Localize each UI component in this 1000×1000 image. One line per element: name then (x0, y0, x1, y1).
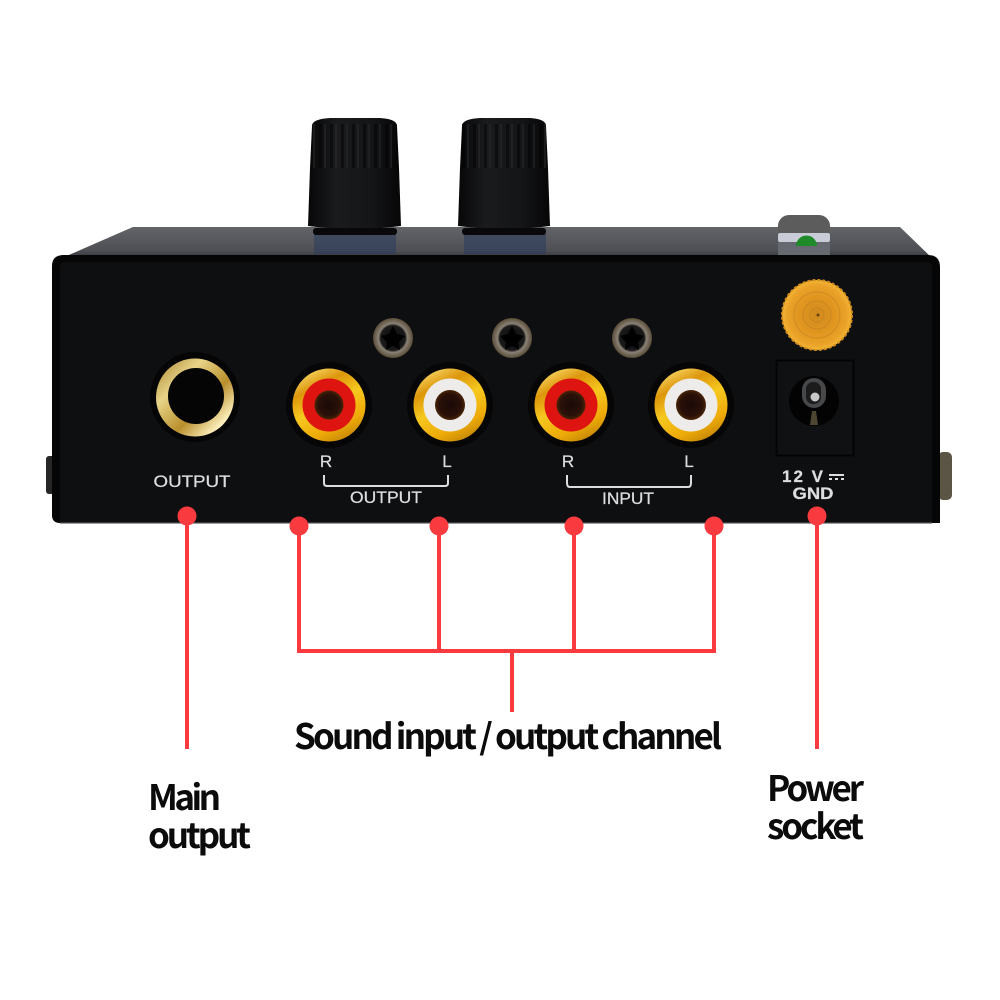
panel screws (373, 318, 652, 358)
panel labels: RCA input group: INPUT (602, 489, 654, 508)
label: power socket: socket (767, 799, 864, 850)
label: power socket (767, 761, 865, 850)
panel labels: RCA input group: L (684, 452, 694, 471)
brass thumb screw (782, 280, 852, 350)
panel labels: RCA output group: L (442, 452, 452, 471)
RCA input left (648, 362, 734, 448)
volume knob right (458, 118, 550, 235)
panel labels: RCA input group (562, 452, 694, 508)
label: main output: Main (148, 770, 221, 821)
output jack (150, 352, 240, 442)
panel labels: RCA output group: R (320, 452, 332, 471)
power button and LED (778, 215, 830, 255)
panel labels: RCA output group: OUTPUT (350, 488, 422, 507)
label: main output (148, 770, 251, 859)
panel label: power rating: 12 V (782, 467, 824, 486)
power socket (776, 360, 854, 456)
panel labels: RCA input group: R (562, 452, 574, 471)
panel label: output: OUTPUT (154, 472, 230, 491)
label: sound channels: Sound input / output channel (294, 709, 722, 760)
panel label: power rating (782, 467, 844, 503)
RCA output left (407, 362, 493, 448)
side screws (46, 452, 952, 500)
volume knob left (308, 118, 401, 235)
callout line: main output (178, 506, 196, 749)
top surface of device (62, 227, 932, 258)
callout bracket: sound channels (290, 516, 724, 712)
panel labels: RCA output group (320, 452, 452, 507)
callout line: power socket (808, 506, 826, 749)
label: main output: output (148, 808, 251, 859)
RCA output right (286, 362, 372, 448)
front panel (52, 255, 940, 524)
RCA input right (528, 362, 614, 448)
panel label: power rating: GND (792, 484, 834, 503)
device (46, 118, 952, 524)
label: power socket: Power (767, 761, 865, 812)
